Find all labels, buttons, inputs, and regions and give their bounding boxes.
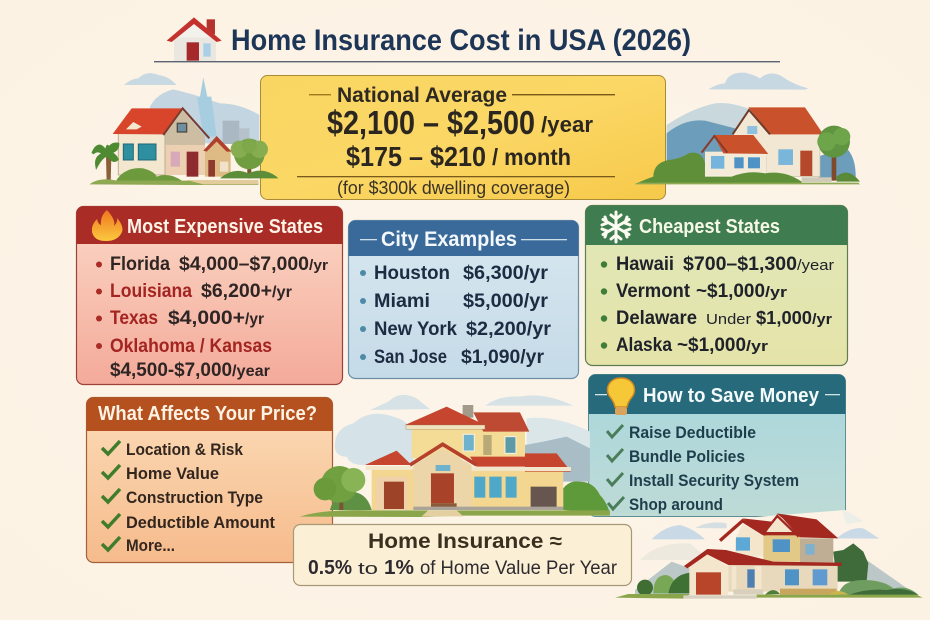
list: expensive states: /yr — [272, 284, 292, 301]
icon: light bulb — [608, 378, 634, 415]
heading: how to save money: How to Save Money — [643, 385, 820, 407]
list: cheap states: ~$1,000 — [677, 335, 746, 356]
monthly cost: / month — [492, 144, 571, 170]
list: cheap states: Under — [706, 311, 751, 328]
list: expensive states: Louisiana — [110, 281, 192, 302]
callout: rule of thumb — [294, 524, 632, 586]
list: saving tips: Install Security System — [629, 471, 799, 490]
icon: flame — [92, 210, 122, 241]
list: cities: San Jose — [374, 347, 447, 368]
list: expensive states: /yr — [245, 311, 264, 328]
panel: city examples — [348, 220, 578, 378]
illustration: bottom right house — [615, 510, 923, 599]
yearly cost: $2,100 – $2,500 — [327, 104, 535, 141]
callout detail: to — [358, 559, 378, 578]
monthly cost — [346, 141, 571, 172]
list: expensive states: $4,000+ — [168, 308, 245, 329]
list: price factors: Construction Type — [126, 488, 263, 507]
list: cheap states: /yr — [812, 311, 832, 328]
list: cities: New York — [374, 319, 457, 340]
list: expensive states: $4,500-$7,000 — [110, 360, 232, 381]
list: cheap states: Vermont — [616, 281, 691, 302]
list: cheap states: Alaska — [616, 335, 672, 356]
list: cities: $1,090/yr — [461, 347, 545, 368]
icon: snowflake — [602, 212, 630, 242]
list: cheap states: /yr — [765, 284, 787, 301]
list: cheap states: ~$1,000 — [696, 281, 765, 302]
list: cities — [360, 263, 552, 368]
title: Home Insurance Cost in USA (2026) — [231, 24, 691, 57]
callout detail: 1% — [384, 557, 414, 579]
list: expensive states: Oklahoma / Kansas — [110, 336, 272, 357]
heading: cheapest states: Cheapest States — [639, 216, 780, 238]
monthly cost: $175 – $210 — [346, 141, 486, 172]
callout detail — [308, 557, 618, 579]
list: cities: $5,000/yr — [463, 291, 549, 312]
callout heading: Home Insurance ≈ — [368, 530, 563, 553]
list: expensive states: $6,200+ — [201, 281, 272, 302]
panel: national average — [260, 76, 666, 200]
list: cheap states: /year — [797, 257, 834, 274]
list: cheap states: Delaware — [616, 308, 697, 329]
illustration: centre house — [300, 395, 610, 517]
panel: how to save money — [588, 374, 846, 516]
list: price factors: Deductible Amount — [126, 513, 275, 532]
list: price factors: Home Value — [126, 464, 219, 483]
heading: what affects your price: What Affects Your Price? — [98, 403, 317, 425]
list: saving tips: Bundle Policies — [629, 447, 745, 466]
list: expensive states: Florida — [110, 254, 170, 275]
list: expensive states — [96, 254, 328, 381]
list: saving tips: Shop around — [629, 495, 723, 514]
illustration: right house with mountains — [635, 73, 860, 184]
list: cities: $2,200/yr — [466, 319, 552, 340]
list: cities: Houston — [374, 263, 450, 284]
list: expensive states: Texas — [110, 308, 158, 329]
panel: cheapest states — [586, 206, 848, 366]
yearly cost: /year — [541, 112, 593, 137]
list: expensive states: /year — [232, 363, 270, 380]
list: expensive states: /yr — [309, 257, 328, 274]
coverage note: (for $300k dwelling coverage) — [337, 178, 570, 198]
list: saving tips: Raise Deductible — [629, 423, 756, 442]
list: price factors — [102, 440, 275, 555]
heading: most expensive states: Most Expensive States — [127, 216, 323, 238]
list: cheap states: $700–$1,300 — [683, 254, 797, 275]
national average heading: National Average — [337, 84, 507, 107]
illustration: left house with city — [89, 73, 278, 185]
callout detail: of Home Value Per Year — [420, 558, 618, 579]
list: cheap states: Hawaii — [616, 254, 674, 275]
list: cheap states: $1,000 — [756, 308, 812, 328]
panel: most expensive states — [76, 206, 342, 384]
list: expensive states: $4,000–$7,000 — [179, 254, 309, 275]
list: cities: Miami — [374, 291, 430, 312]
list: cheap states: /yr — [746, 338, 768, 355]
list: saving tips — [607, 423, 799, 514]
heading: city examples: City Examples — [381, 228, 517, 251]
list: cities: $6,300/yr — [463, 263, 549, 284]
callout detail: 0.5% — [308, 557, 352, 579]
panel: what affects your price — [86, 398, 332, 562]
list: price factors: More... — [126, 536, 175, 555]
list: price factors: Location & Risk — [126, 440, 243, 459]
icon: title house — [167, 17, 222, 61]
list: cheap states — [601, 254, 834, 356]
